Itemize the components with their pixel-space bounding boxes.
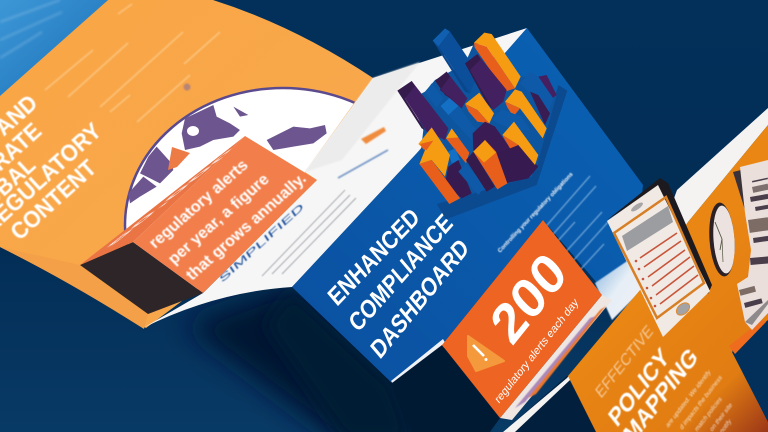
icon: wall clock [707, 202, 737, 277]
orange centre lower bar [473, 140, 507, 189]
patterned fold strip [500, 295, 612, 420]
icon: smartphone cut-out [607, 178, 712, 337]
heading: global regulatory content: CONTENT [5, 154, 102, 245]
small orange centre bar [465, 93, 494, 123]
purple bar, back centre [465, 54, 507, 110]
small copy lines [262, 190, 356, 276]
card: 200 regulatory alerts each day [392, 220, 612, 432]
3D bar chart [397, 28, 567, 219]
heading: effective policy mapping: POLICY [604, 342, 674, 432]
white lower edge of blue panel [391, 339, 447, 386]
panel: orange global regulatory content [0, 0, 373, 328]
lower blue and purple bars [445, 148, 495, 198]
faint body copy [45, 4, 220, 122]
chart silhouette [410, 43, 557, 204]
big orange-yellow front bar [418, 127, 460, 204]
pale corner of the fold [595, 255, 642, 320]
list lines [640, 233, 698, 304]
heading: effective policy mapping [593, 322, 702, 432]
orange pointer [168, 147, 190, 170]
white fold band [503, 108, 768, 432]
callout: regulatory alerts per year: that grows annually. [182, 170, 310, 284]
purple centre cluster [473, 122, 538, 183]
callout: regulatory alerts per year: per year, a figure [164, 170, 273, 268]
flap top with foreshortened number [80, 136, 245, 265]
tall purple bar left [397, 81, 448, 140]
callout: regulatory alerts per year [0, 136, 317, 329]
chevron base [437, 85, 567, 219]
middle blue [492, 109, 530, 130]
body copy: Controlling your regulatory obligations [497, 171, 575, 254]
tall blue bar [433, 28, 478, 93]
shadow under central fold [185, 285, 440, 432]
caption: regulatory alerts each day [493, 296, 581, 406]
card face [442, 220, 602, 418]
right blue and purple bars [520, 72, 557, 125]
body copy [497, 171, 608, 270]
orange bar, right lower [502, 122, 538, 165]
body copy: are updated. We identify [665, 368, 713, 430]
body copy: d impacts the business [679, 373, 724, 432]
orange bar, right upper [505, 89, 547, 138]
globe illustration [124, 86, 356, 289]
panel: blue enhanced compliance dashboard [292, 28, 643, 386]
left cluster blue bars [425, 83, 477, 140]
heading: simplified: SIMPLIFIED [218, 201, 306, 285]
dark underside [392, 345, 500, 432]
small orange arrow bar [446, 128, 469, 163]
callout: regulatory alerts per year: 50,000 [103, 145, 240, 249]
flap face [133, 136, 317, 293]
orange bar, back [474, 33, 521, 92]
number: 200 [480, 241, 577, 356]
panel: orange effective policy mapping [568, 125, 768, 432]
heading: enhanced compliance dashboard: ENHANCED [323, 202, 425, 311]
heading: effective policy mapping: EFFECTIVE [593, 322, 656, 402]
heading: enhanced compliance dashboard: COMPLIANCE [344, 208, 458, 337]
panel: white centre fold [143, 28, 527, 328]
purple bar, left centre [435, 72, 467, 108]
panel: left blue edge [0, 0, 108, 97]
icon: warning triangle [468, 336, 504, 371]
dark fold underside [80, 242, 203, 314]
callout: regulatory alerts per year: regulatory alerts [145, 156, 252, 252]
orange sliver beneath the flap [0, 247, 148, 329]
shadow below the lower orange panel [503, 376, 598, 432]
heading: enhanced compliance dashboard [323, 202, 474, 364]
heading: enhanced compliance dashboard: DASHBOARD [366, 233, 474, 364]
body copy [665, 368, 734, 432]
icon: stack of reports [733, 160, 768, 330]
